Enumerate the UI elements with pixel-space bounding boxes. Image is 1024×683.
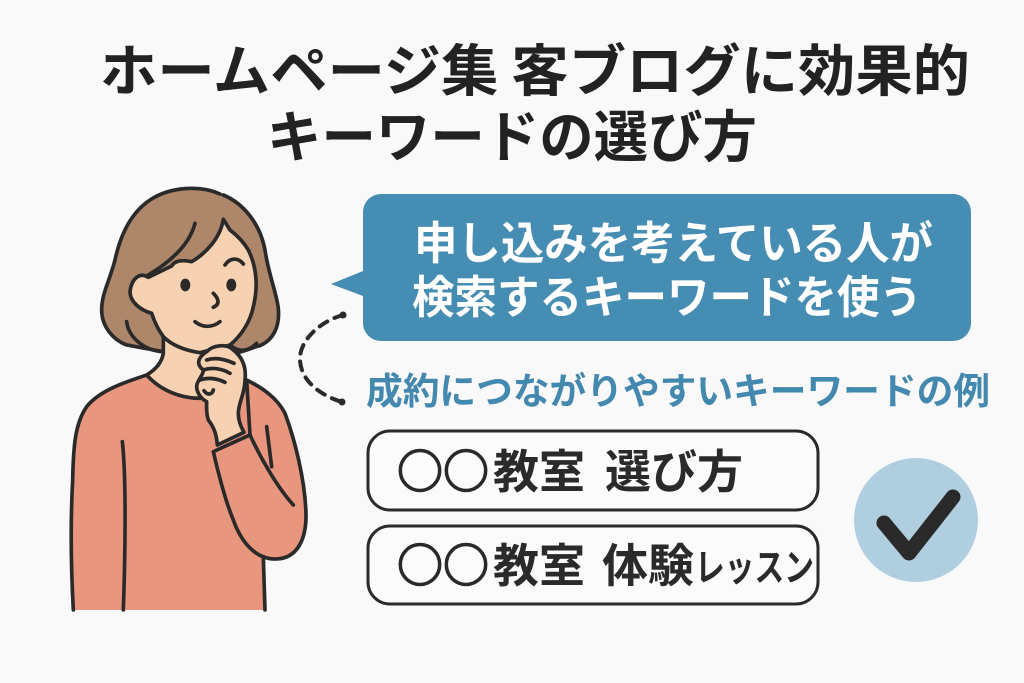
torso left edge bbox=[71, 375, 147, 610]
title: ホームページ集 客ブログに効果的 bbox=[100, 27, 970, 108]
left hair inner line bbox=[127, 322, 162, 352]
dashed connector arrow bbox=[300, 312, 346, 406]
torso right edge bbox=[263, 557, 265, 610]
title bbox=[100, 27, 970, 174]
nose bbox=[213, 293, 218, 307]
speech bubble bbox=[331, 194, 971, 341]
keyword box 2: ○○ bbox=[397, 530, 489, 596]
left arm line bbox=[122, 442, 125, 610]
bubble text: 検索するキーワードを使う bbox=[412, 261, 922, 326]
subheading: 成約につながりやすいキーワードの例 bbox=[366, 361, 990, 415]
sleeve fold bbox=[250, 435, 293, 505]
hand bbox=[197, 346, 245, 445]
right hair inner line bbox=[230, 343, 257, 350]
neck bbox=[147, 337, 217, 398]
right eye bbox=[226, 279, 236, 291]
bubble text bbox=[412, 207, 933, 326]
keyword box 1: 教室 bbox=[493, 436, 585, 502]
check icon bbox=[854, 458, 978, 582]
eyebrow bbox=[225, 259, 243, 265]
keyword box 1: ○○ bbox=[397, 436, 489, 502]
face bbox=[130, 219, 256, 353]
keyword box 2 bbox=[368, 526, 818, 604]
left eye bbox=[180, 279, 190, 291]
keyword box 2: 教室 bbox=[493, 530, 585, 596]
sweater bbox=[71, 375, 265, 610]
fingers bbox=[200, 359, 234, 394]
illustration: thinking woman bbox=[71, 188, 306, 610]
keyword box 2: 体験 bbox=[602, 530, 694, 596]
keyword box 2: レッスン bbox=[695, 537, 814, 592]
title: キーワードの選び方 bbox=[267, 93, 757, 174]
fringe strand bbox=[148, 223, 195, 275]
bubble text: 申し込みを考えている人が bbox=[414, 207, 933, 272]
keyword box 1: 選び方 bbox=[605, 436, 743, 502]
keyword box 1 bbox=[368, 431, 818, 510]
sweater outline and right arm bbox=[213, 380, 306, 559]
elbow crease bbox=[267, 427, 272, 467]
mouth bbox=[195, 322, 220, 326]
hair bbox=[102, 188, 279, 353]
